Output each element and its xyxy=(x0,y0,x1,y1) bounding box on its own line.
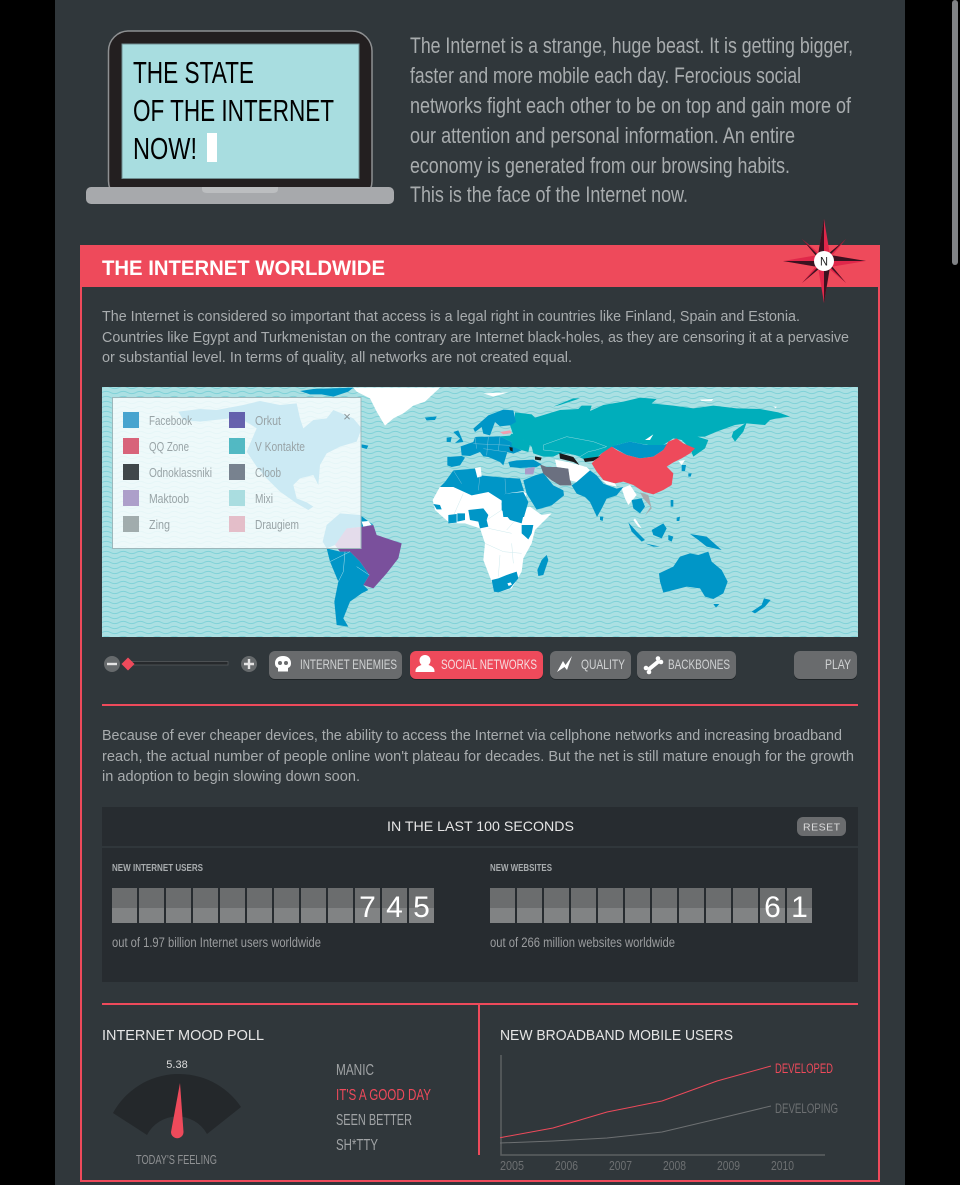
map legend xyxy=(112,398,361,548)
section header bar xyxy=(80,245,880,287)
legend labels: Cloob xyxy=(255,465,281,480)
text block: internet access intro xyxy=(102,308,849,366)
panel: internet mood poll xyxy=(102,1027,431,1167)
button: social networks xyxy=(410,651,543,680)
legend labels: Odnoklassniki xyxy=(149,465,212,480)
year axis labels: 2006 xyxy=(555,1159,578,1173)
legend close button: × xyxy=(343,409,351,424)
button: internet enemies xyxy=(269,651,402,680)
counter: new websites xyxy=(490,862,812,950)
legend labels: Draugiem xyxy=(255,517,299,532)
panel: the internet worldwide xyxy=(80,219,880,1181)
button: quality xyxy=(550,651,631,680)
text block: growth paragraph xyxy=(102,727,854,785)
series labels: DEVELOPING xyxy=(775,1101,838,1116)
title: THE STATE xyxy=(133,55,254,90)
text block: internet access intro: The Internet is considered so important that access is a legal right in countries like Finland, Spain and Estonia. xyxy=(102,308,800,325)
button: play xyxy=(794,651,857,680)
icon: compass rose xyxy=(783,219,866,303)
legend labels: QQ Zone xyxy=(149,439,189,454)
mood options: SH*TTY xyxy=(336,1137,378,1154)
North America xyxy=(178,401,362,510)
title: OF THE INTERNET xyxy=(133,93,334,128)
northern South America xyxy=(323,513,373,548)
counter: new internet users: 7 xyxy=(359,891,376,924)
counter: new internet users: 4 xyxy=(386,891,403,924)
panel: new broadband mobile users: NEW BROADBAND MOBILE USERS xyxy=(500,1027,733,1044)
gauge xyxy=(113,1059,241,1167)
Turkey xyxy=(508,460,542,468)
mood options: SEEN BETTER xyxy=(336,1112,412,1129)
counter: new internet users xyxy=(112,862,434,950)
legend labels: Orkut xyxy=(255,413,281,428)
text block: growth paragraph: reach, the actual number of people online won't plateau for decades. But the net is still mature enough for the growth xyxy=(102,748,854,765)
Southeast Asia xyxy=(602,460,685,528)
Iran xyxy=(540,464,572,485)
legend labels xyxy=(149,413,305,532)
year axis labels xyxy=(500,1159,794,1173)
laptop title illustration xyxy=(86,31,394,204)
counter: new internet users: out of 1.97 billion Internet users worldwide xyxy=(112,935,321,950)
counter: new internet users: NEW INTERNET USERS xyxy=(112,862,203,874)
series labels xyxy=(775,1061,838,1116)
text block: internet access intro: or substantial level. In terms of quality, all networks are not created equal. xyxy=(102,349,572,366)
intro text: faster and more mobile each day. Ferocious social xyxy=(410,63,801,88)
panel: new broadband mobile users xyxy=(500,1027,838,1173)
Arctic islands xyxy=(300,388,437,449)
intro text: networks fight each other to be on top and gain more of xyxy=(410,93,852,118)
counter: new websites: out of 266 million websites worldwide xyxy=(490,935,675,950)
Russia and Kazakhstan xyxy=(510,398,790,459)
button: backbones: BACKBONES xyxy=(668,656,730,672)
counter: new websites: 1 xyxy=(791,891,808,924)
Europe, Middle East and India xyxy=(425,410,623,517)
Australia and New Zealand xyxy=(659,552,771,613)
Uzbekistan, Kyrgyzstan, Azerbaijan, Moldova xyxy=(509,447,600,465)
button: backbones xyxy=(637,651,736,680)
counter panel heading: IN THE LAST 100 SECONDS xyxy=(387,818,574,834)
text block: internet access intro: Countries like Egypt and Turkmenistan on the contrary are Internet black-holes, as they are censoring it at a pervasive xyxy=(102,329,849,346)
Russia, China and Asia-Pacific xyxy=(483,392,790,613)
world map xyxy=(102,387,858,637)
Afghanistan xyxy=(555,460,590,482)
Baltic state xyxy=(500,430,512,434)
text block: growth paragraph: Because of ever cheaper devices, the ability to access the Internet via cellphone networks and increasing broadband xyxy=(102,727,842,744)
Europe xyxy=(425,410,522,467)
year axis labels: 2007 xyxy=(609,1159,632,1173)
legend labels: Facebook xyxy=(149,413,192,428)
year axis labels: 2010 xyxy=(771,1159,794,1173)
year axis labels: 2008 xyxy=(663,1159,686,1173)
intro text: This is the face of the Internet now. xyxy=(410,182,688,207)
China xyxy=(592,438,695,494)
Brazil xyxy=(335,525,402,588)
scrollbar xyxy=(952,0,958,265)
reset button: RESET xyxy=(803,822,841,834)
Syria xyxy=(525,467,535,474)
mood options xyxy=(336,1062,431,1154)
legend labels: Zing xyxy=(149,517,170,532)
panel: in the last 100 seconds xyxy=(102,807,858,982)
counter: new websites: NEW WEBSITES xyxy=(490,862,552,874)
panel: internet mood poll: INTERNET MOOD POLL xyxy=(102,1027,264,1044)
Arabia xyxy=(523,473,564,510)
intro text: economy is generated from our browsing habits. xyxy=(410,153,790,178)
intro text xyxy=(410,33,853,207)
icon: compass rose: N xyxy=(820,254,828,268)
legend swatches xyxy=(123,412,245,532)
legend labels: Maktoob xyxy=(149,491,189,506)
intro text: our attention and personal information. An entire xyxy=(410,123,795,148)
mood options: MANIC xyxy=(336,1062,374,1079)
Africa xyxy=(433,480,552,592)
zoom slider xyxy=(104,656,257,672)
cursor block xyxy=(207,133,217,162)
India and Pakistan xyxy=(572,470,623,517)
Americas xyxy=(178,388,440,627)
mood options: IT'S A GOOD DAY xyxy=(336,1087,431,1104)
reset button xyxy=(797,817,846,836)
series: developed xyxy=(500,1066,771,1138)
intro text: The Internet is a strange, huge beast. It is getting bigger, xyxy=(410,33,853,58)
legend labels: Mixi xyxy=(255,491,273,506)
Mongolia xyxy=(612,442,668,458)
counter: new internet users: 5 xyxy=(413,891,430,924)
button: internet enemies: INTERNET ENEMIES xyxy=(300,656,397,672)
series: developing xyxy=(500,1106,771,1143)
North Africa xyxy=(433,469,524,502)
series labels: DEVELOPED xyxy=(775,1061,833,1076)
line chart xyxy=(500,1055,838,1173)
Ukraine and Belarus xyxy=(500,434,530,452)
section header bar: THE INTERNET WORLDWIDE xyxy=(102,256,385,280)
button: play: PLAY xyxy=(825,656,851,672)
button: quality: QUALITY xyxy=(581,656,625,672)
year axis labels: 2005 xyxy=(500,1159,524,1173)
year axis labels: 2009 xyxy=(717,1159,740,1173)
legend labels: V Kontakte xyxy=(255,439,305,454)
gauge: 5.38 xyxy=(166,1059,188,1071)
gauge: TODAY'S FEELING xyxy=(136,1153,217,1167)
title xyxy=(133,55,334,166)
Southern cone xyxy=(327,548,369,627)
counter: new websites: 6 xyxy=(764,891,781,924)
title: NOW! xyxy=(133,131,197,166)
Greenland xyxy=(353,388,440,426)
button: social networks: SOCIAL NETWORKS xyxy=(441,656,537,672)
text block: growth paragraph: in adoption to begin slowing down soon. xyxy=(102,768,360,785)
